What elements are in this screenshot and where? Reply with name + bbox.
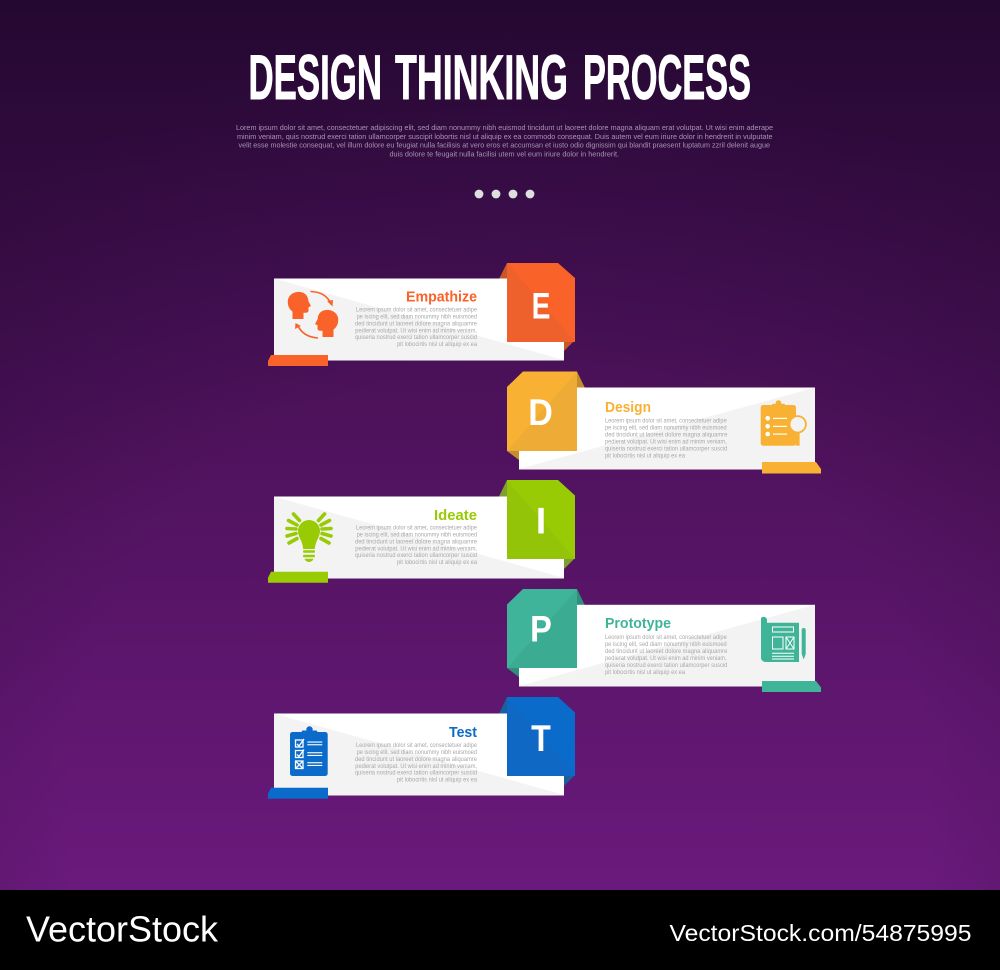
body text: quiseria nostrud exerci tation ullamcorper suscid [355,769,477,776]
panel: Design [507,372,821,474]
letter tile E [507,263,575,342]
body text [355,307,477,348]
body text: pit lobocirtis nisl ut aliquip ex ea [397,559,477,566]
letter tile T [507,697,575,776]
folded tile back I [499,480,575,569]
body text: Leorem ipsum dolor sit amet, consectetuer adipe [605,634,727,641]
icon: two heads with arrows [288,292,338,338]
panel: Empathize [268,263,575,366]
letter tile D [507,372,577,451]
footer logo text: VectorStock [26,908,219,950]
intro text block: minim veniam, quis nostrud exerci tation ullamcorper suscipit lobortis nisl ut aliquip ex ea commodo consequat. Duis autem vel eum iriure dolor in hendrerit in vulputate [237,132,772,141]
title: THINKING [395,43,568,113]
intro text block: duis dolore te feugait nulla facilisi utem vel eum iriure dolor in hendrerit. [390,150,619,158]
body text: ded tincidunt ut laoreet dolore magna aliquamre [355,756,477,763]
body text: pedierat volutpat. Ut wisi enim ad minim veniam, [605,655,727,662]
footer image id: VectorStock.com/54875995 [670,920,972,946]
tab [762,462,821,474]
body text: pit lobocirtis nisl ut aliquip ex ea [397,341,477,348]
icon: clipboard with magnifier [761,400,806,446]
body text: pedierat volutpat. Ut wisi enim ad minim veniam, [605,438,727,445]
tab [268,355,328,366]
panel: Prototype [507,589,821,692]
body text [605,417,728,459]
body text: pit lobocirtis nisl ut aliquip ex ea [605,452,685,459]
body text: quiseria nostrud exerci tation ullamcorper suscid [605,662,728,669]
tab [268,788,328,799]
panel: Ideate [268,480,575,583]
card [519,605,815,687]
body text: pedierat volutpat. Ut wisi enim ad minim veniam, [355,327,477,334]
letter tile I [507,480,575,559]
icon: checklist clipboard [290,726,328,776]
card [519,388,815,470]
body text: pe iscing elit, sed diam nonummy nibh euismoed [605,641,727,648]
folded tile back D [507,372,585,460]
body text: Leorem ipsum dolor sit amet, consectetuer adipe [356,307,477,314]
body text [355,742,477,783]
icon: light bulb [287,514,331,562]
letter tile P [507,589,577,668]
letter tile I: I [536,501,546,542]
heading: Ideate [434,508,477,524]
intro text block: Lorem ipsum dolor sit amet, consectetuer adipiscing elit, sed diam nonummy nibh euismod tincidunt ut laoreet dolore magna aliquam erat volutpat. Ut wisi enim aderape [236,123,773,132]
folded tile back T [499,697,575,786]
body text: ded tincidunt ut laoreet dolore magna aliquamre [355,538,477,545]
body text: Leorem ipsum dolor sit amet, consectetuer adipe [356,525,477,532]
heading: Test [449,725,477,741]
card [274,278,564,361]
body text: quiseria nostrud exerci tation ullamcorper suscid [355,552,477,559]
body text: pe iscing elit, sed diam nonummy nibh euismoed [357,532,477,539]
title [248,43,751,113]
folded tile back P [507,589,585,677]
panel: Test [268,697,575,799]
icon: blueprint and pencil [761,617,806,662]
letter tile P: P [530,609,552,650]
body text: pit lobocirtis nisl ut aliquip ex ea [605,669,685,676]
letter tile T: T [531,719,551,760]
body text: Leorem ipsum dolor sit amet, consectetuer adipe [356,742,477,749]
body text [355,525,477,566]
body text: ded tincidunt ut laoreet dolore magna aliquamre [605,648,728,655]
body text: pedierat volutpat. Ut wisi enim ad minim veniam, [355,545,477,552]
body text: quiseria nostrud exerci tation ullamcorper suscid [605,445,728,452]
footer bar [0,890,1000,970]
tab [762,681,821,692]
body text: quiseria nostrud exerci tation ullamcorper suscid [355,334,477,341]
body text [605,634,728,676]
intro text block [236,123,773,158]
title: PROCESS [583,43,751,113]
letter tile E: E [532,285,550,326]
heading: Empathize [406,290,477,306]
body text: ded tincidunt ut laoreet dolore magna aliquamre [355,320,477,327]
body text: pe iscing elit, sed diam nonummy nibh euismoed [605,424,727,431]
pagination dots [475,190,534,198]
card [274,496,564,579]
body text: pit lobocirtis nisl ut aliquip ex ea [397,776,477,783]
card [274,714,564,796]
body text: ded tincidunt ut laoreet dolore magna aliquamre [605,431,728,438]
heading: Design [605,400,651,416]
tab [268,572,328,583]
intro text block: velit esse molestie consequat, vel illum dolore eu feugiat nulla facilisis at vero eros et accumsan et iusto odio dignissim qui blandit praesent luptatum zzril delenit augue [238,141,770,150]
body text: pe iscing elit, sed diam nonummy nibh euismoed [357,314,477,321]
heading: Prototype [605,616,671,632]
folded tile back E [499,263,575,351]
body text: Leorem ipsum dolor sit amet, consectetuer adipe [605,417,727,424]
body text: pedierat volutpat. Ut wisi enim ad minim veniam, [355,763,477,770]
title: DESIGN [248,43,382,113]
letter tile D: D [528,392,553,433]
body text: pe iscing elit, sed diam nonummy nibh euismoed [357,749,477,756]
